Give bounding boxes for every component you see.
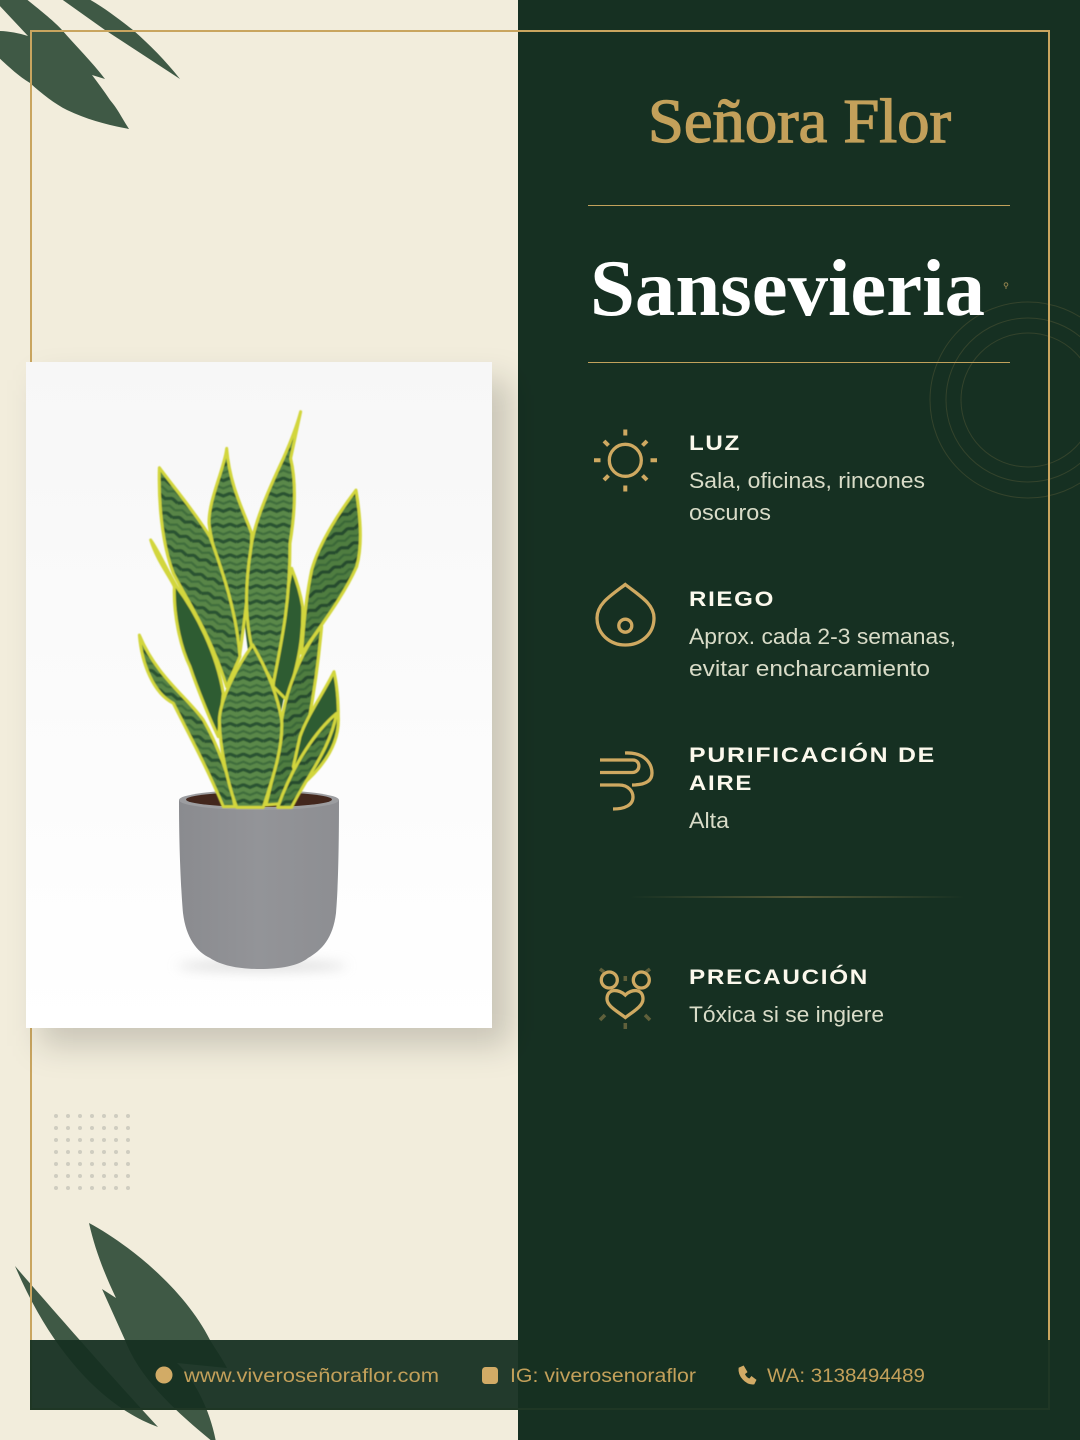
- decoration: top-left leaves: [0, 0, 180, 129]
- footer: website: www.viveroseñoraflor.com: [183, 1366, 439, 1387]
- pot: [179, 790, 339, 969]
- photo: potted sansevieria: [26, 362, 492, 1028]
- heading: purificación de aire: [689, 742, 936, 795]
- plant name: Sansevieria: [590, 245, 985, 333]
- panel: dark green background: [518, 0, 1080, 1440]
- icon: sun: [594, 430, 657, 492]
- text: luz: Sala, oficinas, rincones: [689, 468, 925, 493]
- heading: riego: RIEGO: [689, 587, 775, 611]
- divider bottom: [588, 362, 1010, 363]
- text: riego: [689, 624, 956, 681]
- tiny ornament: [1004, 283, 1008, 289]
- pot ground shadow: [177, 961, 347, 971]
- icon: heart warning: [600, 969, 650, 1029]
- item: precaución: [600, 964, 884, 1029]
- item: purificación de aire: [600, 742, 936, 833]
- footer bar: [30, 1340, 1050, 1410]
- divider gradient: [630, 896, 965, 898]
- item: riego: [597, 584, 956, 681]
- text: purificación: Alta: [689, 808, 730, 833]
- panel: cream background: [0, 0, 518, 1440]
- text: luz: oscuros: [689, 500, 771, 525]
- item: luz: [594, 430, 925, 525]
- footer: instagram: IG: viverosenoraflor: [510, 1366, 697, 1387]
- photo shadow: [40, 380, 510, 1046]
- plant leaves: [139, 412, 360, 807]
- text: luz: [689, 468, 925, 525]
- decoration: dot grid: [54, 1114, 130, 1190]
- icon: wind: [600, 753, 652, 809]
- text: precaución: Tóxica si se ingiere: [689, 1002, 884, 1027]
- heading: luz: LUZ: [689, 431, 741, 455]
- heading: purificación de aire: AIRE: [689, 771, 753, 795]
- decoration: concentric circles: [930, 302, 1080, 498]
- divider top: [588, 205, 1010, 206]
- icon: water drop: [597, 584, 654, 645]
- decoration: bottom-left leaves: [15, 1223, 227, 1440]
- text: riego: evitar encharcamiento: [689, 656, 930, 681]
- footer: whatsapp: WA: 3138494489: [767, 1366, 925, 1387]
- brand title: Señora Flor: [648, 88, 951, 156]
- text: riego: Aprox. cada 2-3 semanas,: [689, 624, 956, 649]
- heading: purificación de aire: PURIFICACIÓN DE: [689, 742, 936, 767]
- heading: precaución: PRECAUCIÓN: [689, 964, 869, 989]
